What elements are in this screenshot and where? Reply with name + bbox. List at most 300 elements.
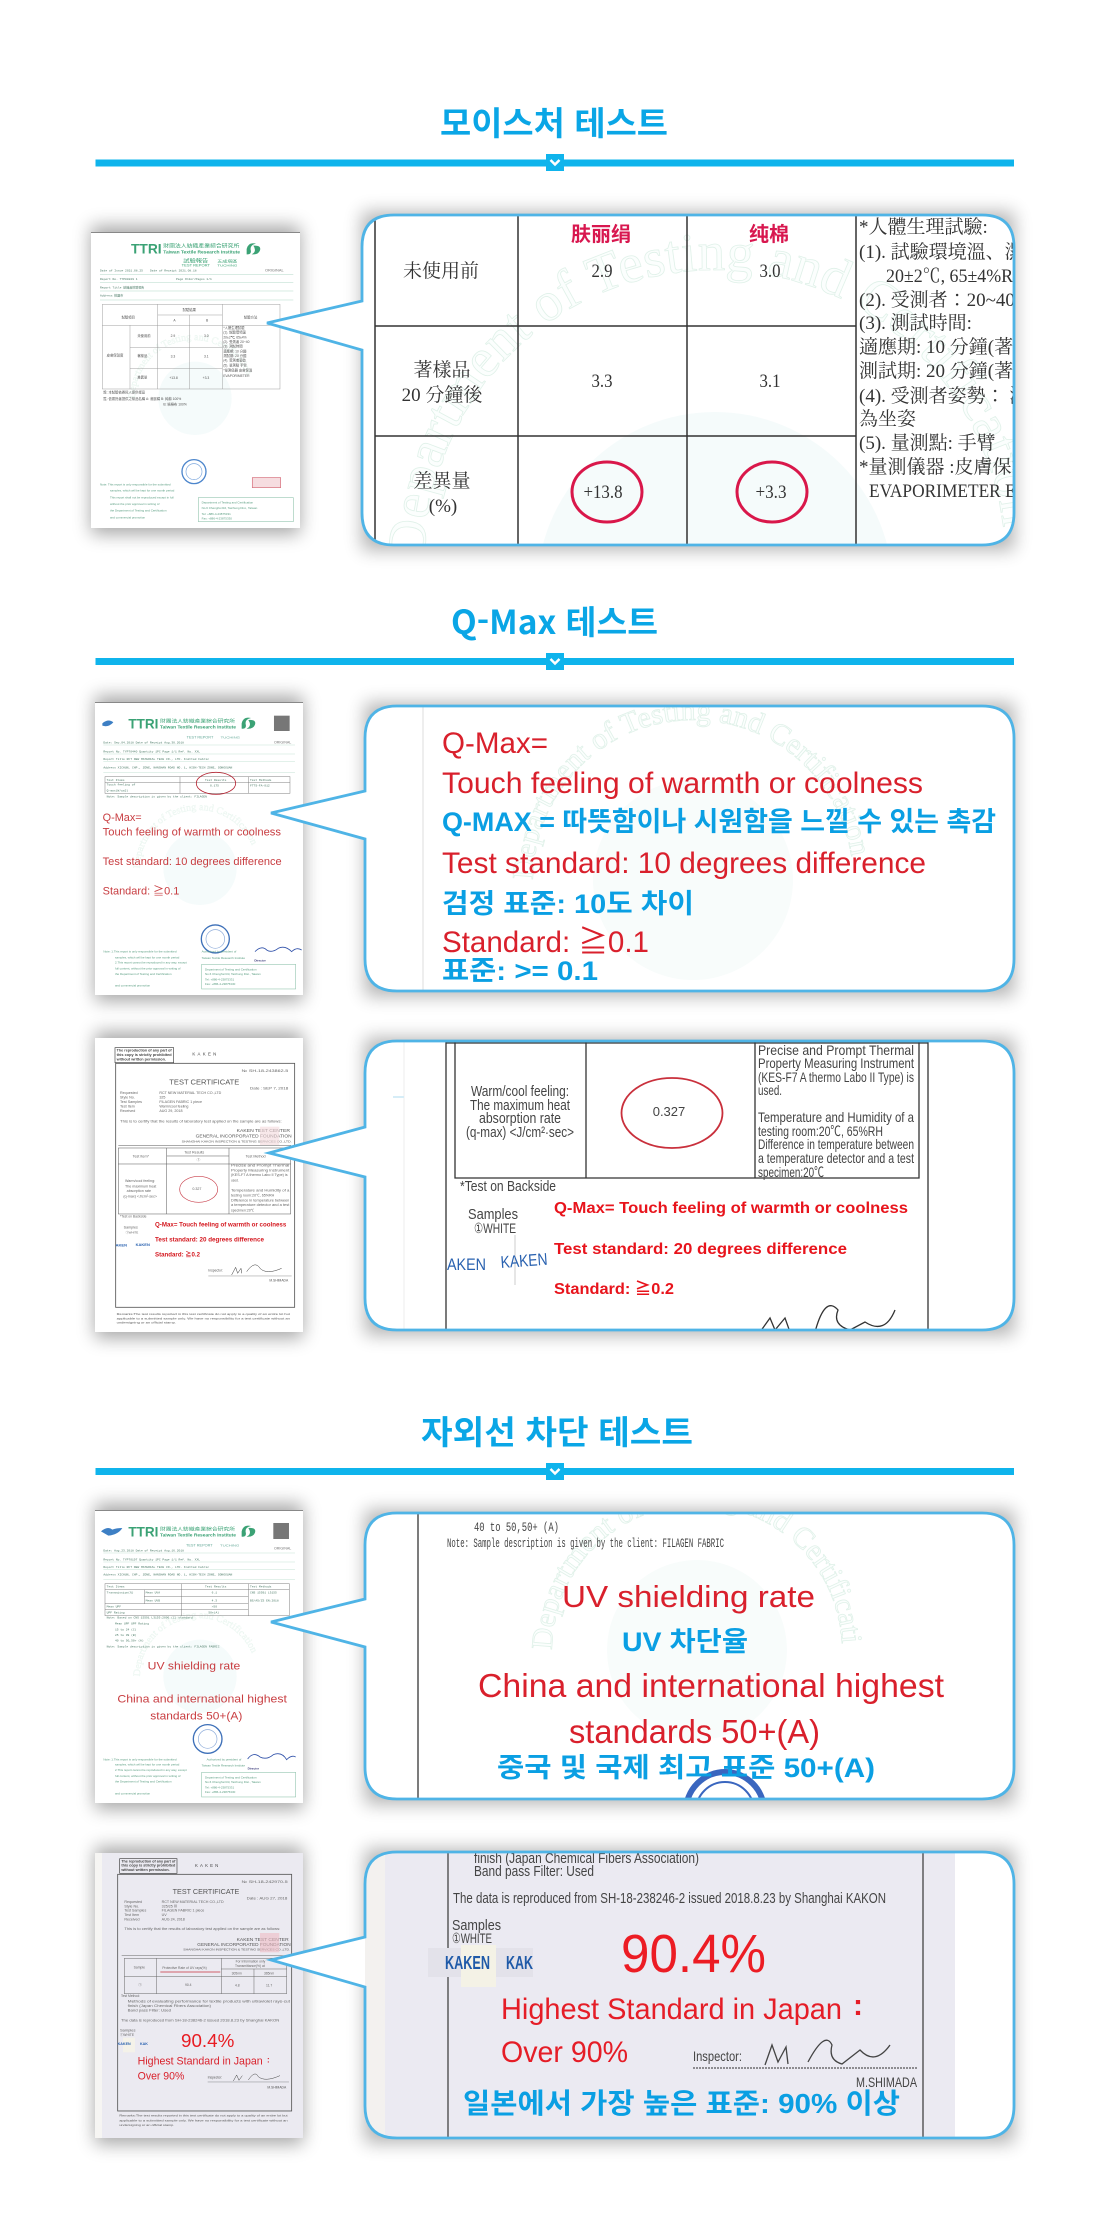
document thumbnail: TTRI moisture report: Report No. TYP00229 1 (100, 277, 138, 281)
document thumbnail: KAKEN UV certificate: TEST CERTIFICATE (173, 1887, 239, 1896)
report note lines: Note: Sample description is given by the client: FILAGEN FABRIC (447, 1536, 724, 1551)
document thumbnail: TTRI UV report: TTRI (128, 1523, 158, 1539)
English definition text: Standard: ≧0.1 (442, 926, 649, 959)
document thumbnail: TTRI moisture report: 試驗項目 (122, 314, 135, 319)
document thumbnail: TTRI moisture report: 未使用前 (137, 333, 151, 338)
document thumbnail: TTRI UV report: Test Methods (250, 1585, 272, 1589)
document thumbnail: TTRI moisture report: 20±2℃, 65±4% (223, 335, 247, 339)
test conditions notes: 測試期: 20 分鐘(著樣品) (859, 360, 1057, 382)
English standard text: : (853, 1989, 863, 2022)
scan text lines: Band pass Filter: Used (474, 1863, 594, 1880)
document thumbnail: TTRI UV report: Authorized by president of (207, 1757, 241, 1761)
document thumbnail: TTRI moisture report: B (206, 319, 209, 323)
document thumbnail: TTRI Q-Max report: Q-max(W/cm2) (107, 789, 128, 793)
table values: +13.8 (584, 482, 622, 503)
document thumbnail: TTRI Q-Max report: the Department of Testing and Certification (115, 972, 172, 976)
document thumbnail: KAKEN UV certificate: GENERAL INCORPORATED FOUNDATION (197, 1942, 291, 1947)
document thumbnail: KAKEN UV certificate: 4.8 (235, 1983, 240, 1987)
document thumbnail: TTRI Q-Max report: Authorized by president of (202, 949, 236, 953)
document thumbnail: TTRI UV report: Report Title RCT NEW MATERIAL TECH CO., LTD. Knitted Fabric (103, 1565, 209, 1569)
document thumbnail: TTRI moisture report: (4). 受測者姿勢 (223, 358, 247, 363)
document thumbnail: KAKEN Q-Max certificate: Test Item (120, 1104, 135, 1108)
fabric swatch with KAKEN print: KAKEN (500, 1250, 548, 1272)
document thumbnail: TTRI UV report: BS/AS/ZS EN:2018 (250, 1599, 279, 1603)
document thumbnail: TTRI UV report: Fax: +886-4-23875330 (205, 1790, 236, 1794)
callout: UV shielding rate (270, 1500, 1024, 1814)
document thumbnail: TTRI UV report: Mean UVA (146, 1592, 160, 1595)
test method notes: a temperature detector and a test (758, 1150, 914, 1166)
scan text lines (452, 1850, 886, 1946)
document thumbnail: TTRI Q-Max report: TTRI (128, 715, 158, 731)
document thumbnail: KAKEN Q-Max certificate: 0.327 (192, 1187, 201, 1191)
document thumbnail: TTRI moisture report: (2). 受測者 20~40 (223, 339, 250, 344)
document thumbnail: TTRI moisture report: 試驗報告 (183, 257, 208, 264)
scan text lines: finish (Japan Chemical Fibers Association) (474, 1850, 699, 1867)
document thumbnail: KAKEN UV certificate: 11.7 (266, 1983, 272, 1987)
document thumbnail: KAKEN Q-Max certificate: ①WHITE (126, 1229, 138, 1234)
red circles on difference values (572, 462, 807, 522)
document thumbnail: KAKEN UV certificate: AUG 24, 2018 (162, 1918, 185, 1922)
certificate table (446, 1041, 928, 1330)
Korean UV text: 중국 및 국제 최고 표준 50+(A) (497, 1753, 875, 1783)
callout: Q-Max definition and standard (270, 692, 1024, 1006)
warm/cool feeling label (466, 1083, 574, 1141)
samples label (468, 1208, 518, 1234)
red annotation text: Q-Max= Touch feeling of warmth or coolness (554, 1200, 908, 1217)
document thumbnail: KAKEN Q-Max certificate (95, 1032, 303, 1338)
document thumbnail: KAKEN Q-Max certificate: № SH-18-243862-5 (242, 1069, 288, 1073)
document thumbnail: KAKEN Q-Max certificate: without written permission. (116, 1057, 166, 1061)
document thumbnail: TTRI UV report: full content, without the prior approval in writing of (115, 1774, 181, 1778)
test conditions notes: *人體生理試驗: (859, 216, 988, 238)
document thumbnail: TTRI Q-Max report: Test Results (205, 778, 227, 782)
red annotation text: Standard: ≧0.2 (554, 1279, 674, 1298)
document thumbnail: TTRI moisture report: ORIGINAL (265, 269, 284, 273)
document thumbnail: KAKEN Q-Max certificate: AKEN (116, 1243, 127, 1248)
document thumbnail: TTRI moisture report: TTRI (131, 240, 162, 256)
document thumbnail: KAKEN Q-Max certificate: specimen:20℃ (231, 1209, 255, 1213)
document thumbnail: KAKEN Q-Max certificate: Property Measuring Instrument (231, 1168, 289, 1172)
document thumbnail: TTRI Q-Max report: Fax: +886-4-23875330 (205, 982, 236, 986)
test conditions notes: EVAPORIMETER EP1 (869, 481, 1034, 502)
document thumbnail: TTRI moisture report: *量測儀器 皮膚保濕 (223, 368, 253, 373)
Korean standard text: 일본에서 가장 높은 표준: 90% 이상 (463, 2088, 900, 2119)
document thumbnail: KAKEN UV certificate: Style No. (124, 1904, 139, 1908)
document thumbnail: KAKEN Q-Max certificate: KAKEN TEST CENTER (237, 1128, 290, 1133)
test conditions notes: (3). 測試時間: (859, 312, 972, 334)
result value with red circle: 0.327 (653, 1104, 685, 1119)
English UV text (478, 1579, 944, 1750)
document thumbnail: KAKEN UV certificate (95, 1847, 303, 2144)
document thumbnail: KAKEN UV certificate: KAK (140, 2042, 148, 2046)
fabric swatch with KAKEN print: KAKEN (445, 1953, 490, 1973)
document thumbnail: KAKEN Q-Max certificate: Test standard: 20 degrees difference (155, 1236, 264, 1243)
document thumbnail: KAKEN UV certificate: M.SHIMADA (267, 2085, 287, 2089)
document thumbnail: TTRI Q-Max report: Date: Sep.04.2018 Date of Receipt Aug.30.2018 (103, 740, 184, 744)
document thumbnail: TTRI moisture report: Department of Testing and Certification (202, 500, 254, 504)
document thumbnail: TTRI moisture report: No.6 Chenghsi Rd, Taichung Dist., Taiwan (202, 506, 258, 510)
document thumbnail: TTRI moisture report: Taiwan Textile Research Institute (163, 249, 240, 254)
document thumbnail: TTRI UV report: Taiwan Textile Research Institute (202, 1763, 245, 1767)
document thumbnail: KAKEN UV certificate: UV (162, 1913, 167, 1917)
document thumbnail: TTRI Q-Max report: TUCHING (221, 735, 241, 739)
document thumbnail: KAKEN UV certificate: Inspector: (208, 2076, 222, 2080)
document thumbnail: KAKEN Q-Max certificate: RCT NEW MATERIAL TECH CO.,LTD (159, 1091, 222, 1095)
document thumbnail: TTRI Q-Max report: Director (254, 959, 267, 963)
Korean definition text (442, 807, 996, 986)
document thumbnail: TTRI moisture report: B: 純棉布 100% (163, 402, 187, 407)
document thumbnail: KAKEN UV certificate: This is to certify that the results of laboratory test applied on the sample are as follows: (124, 1927, 280, 1931)
Korean definition text: 표준: >= 0.1 (442, 956, 598, 986)
document thumbnail: TTRI Q-Max report: 2.This report cannot be reproduced in any way, except (115, 961, 187, 965)
document thumbnail: TTRI UV report: 50+(A) (208, 1610, 219, 1614)
document thumbnail: KAKEN Q-Max certificate: FILAGEN FABRIC 1 piece (159, 1100, 202, 1104)
section heading: Q-Max 테스트 (96, 596, 1014, 670)
document thumbnail: KAKEN UV certificate: Samples (120, 2028, 136, 2033)
document thumbnail: TTRI UV report: Taiwan Textile Research Institute (160, 1532, 236, 1537)
document thumbnail: TTRI UV report: Department of Testing and Certification (205, 1775, 257, 1779)
document thumbnail: KAKEN Q-Max certificate: Received (120, 1109, 135, 1113)
document thumbnail: TTRI UV report: and commercial promotion (115, 1791, 151, 1795)
document thumbnail: TTRI moisture report: 3.1 (204, 355, 209, 359)
big value 90.4%: 90.4% (621, 1924, 766, 1984)
document thumbnail: TTRI UV report: Department of Testing and Certification (133, 1612, 256, 1676)
document thumbnail: TTRI UV report: UV shielding rate (148, 1661, 240, 1673)
document thumbnail: TTRI moisture report: Date of Issue 2021.08.25 (100, 269, 143, 273)
document thumbnail: TTRI Q-Max report: Test Items (107, 779, 125, 782)
document thumbnail: KAKEN UV certificate: applicable to a submitted sample only. We have no responsibility for a test certificate without an (119, 2118, 288, 2122)
table header (571, 224, 788, 244)
document thumbnail: TTRI Q-Max report: Touch feeling of (107, 783, 136, 787)
divider bar (96, 160, 1014, 166)
Korean definition text: 검정 표준: 10도 차이 (442, 889, 694, 919)
test method notes (758, 1042, 914, 1180)
document thumbnail: TTRI moisture report: Note: This report is only responsible for the submitted (100, 483, 171, 487)
document thumbnail: KAKEN UV certificate: 305nm (232, 1971, 242, 1975)
document thumbnail: TTRI Q-Max report: Touch feeling of warmth or coolness (103, 826, 281, 838)
document thumbnail: TTRI Q-Max report: No.6 Chenghsi Rd, Taichung Dist., Taiwan (205, 972, 261, 976)
test conditions notes: (1). 試驗環境溫、濕度 (859, 241, 1043, 263)
document thumbnail: TTRI UV report: Director (248, 1767, 260, 1771)
inspector signature: M.SHIMADA (856, 2074, 918, 2090)
document thumbnail: KAKEN Q-Max certificate: The reproduction of any part of (117, 1049, 173, 1053)
document thumbnail: TTRI Q-Max report: Note: 1.This report is only responsible for the submitted (103, 949, 177, 953)
document thumbnail: TTRI moisture report: (1). 試驗環境溫 (223, 330, 247, 335)
callout: UV shielding rate: Department of Testing and Certification (532, 1514, 862, 1650)
document thumbnail: TTRI UV report: TEST REPORT (186, 1543, 213, 1547)
document thumbnail: TTRI Q-Max report: TEST REPORT (187, 735, 213, 739)
document thumbnail: TTRI UV report: 6.1 (212, 1592, 217, 1595)
table values: 3.0 (760, 261, 780, 282)
document thumbnail: TTRI UV report: Mean UVB (146, 1600, 160, 1603)
document thumbnail: KAKEN Q-Max certificate: this copy is strictly prohibited (117, 1053, 172, 1057)
title: Q-Max 테스트 (451, 596, 658, 644)
document thumbnail: KAKEN Q-Max certificate: Samples (124, 1225, 138, 1229)
document thumbnail: KAKEN UV certificate: Date : AUG 27, 2018 (247, 1896, 287, 1900)
document thumbnail: TTRI Q-Max report: 財團法人紡織產業綜合研究所 (160, 717, 235, 724)
document thumbnail: KAKEN Q-Max certificate: KAKEN (136, 1242, 150, 1247)
document thumbnail: TTRI UV report: Test Results (205, 1585, 227, 1589)
document thumbnail: TTRI UV report: Test Items (107, 1586, 125, 1589)
callout: magnified KAKEN Q-Max result (269, 1038, 1014, 1335)
test method notes: (KES-F7 A thermo Labo II Type) is (758, 1069, 914, 1085)
document thumbnail: TTRI Q-Max report: Q-Max= (103, 812, 142, 824)
document thumbnail: KAKEN UV certificate: undersigning or an official stamp. (119, 2123, 175, 2127)
document thumbnail: TTRI UV report: Note: 1.This report is only responsible for the submitted (103, 1757, 177, 1761)
document thumbnail: TTRI moisture report: Page Order/Pages 1/1 (176, 277, 212, 281)
callout: magnified moisture table: Department of Testing and Certification (389, 234, 1012, 544)
document thumbnail: KAKEN Q-Max certificate: (q-max) <J/cm²·sec> (123, 1194, 157, 1198)
document thumbnail: KAKEN UV certificate: KAKEN (118, 2042, 131, 2046)
document thumbnail: TTRI moisture report: *人體生理試驗 (223, 325, 245, 330)
document thumbnail: TTRI Q-Max report: Department of Testing and Certification (205, 967, 257, 971)
document thumbnail: TTRI UV report: No.6 Chenghsi Rd, Taichung Dist., Taiwan (205, 1780, 261, 1784)
document thumbnail: KAKEN Q-Max certificate: Test Results (184, 1151, 204, 1155)
document thumbnail: KAKEN Q-Max certificate: a temperature detector and a test (231, 1203, 289, 1207)
test conditions notes: *量測儀器 :皮膚保濕 (859, 456, 1032, 478)
document thumbnail: KAKEN Q-Max certificate: absorption rate (127, 1189, 151, 1193)
document thumbnail: TTRI Q-Max report: FTTS-FA-012 (250, 784, 270, 787)
table values: +3.3 (756, 482, 786, 503)
document thumbnail: KAKEN Q-Max certificate: Date : SEP 7, 2018 (250, 1086, 288, 1090)
test conditions notes: 20±2℃, 65±4%RH (886, 266, 1026, 287)
test method notes: Precise and Prompt Thermal (758, 1042, 914, 1058)
document thumbnail: KAKEN Q-Max certificate: (KES-F7 A thermo Labo II Type) is (231, 1173, 288, 1177)
document thumbnail: TTRI Q-Max report: Test standard: 10 degrees difference (103, 856, 282, 868)
document thumbnail: TTRI UV report: UPF Rating (107, 1610, 125, 1614)
document thumbnail: KAKEN UV certificate: SHANGHAI KAKON INSPECTION & TESTING SERVICES CO.,LTD. (183, 1947, 290, 1951)
document thumbnail: TTRI moisture report: TUCHING (217, 264, 238, 268)
document thumbnail: KAKEN UV certificate: KAKEN (195, 1863, 218, 1868)
document thumbnail: KAKEN Q-Max certificate: Q-Max= Touch feeling of warmth or coolness (155, 1221, 287, 1228)
fabric swatch with KAKEN print: AKEN (447, 1255, 486, 1274)
Korean definition text: Q-MAX = 따뜻함이나 시원함을 느낄 수 있는 촉감 (442, 807, 996, 837)
document thumbnail: TTRI UV report: Transmission(%) (107, 1591, 134, 1595)
document thumbnail: KAKEN Q-Max certificate: used. (231, 1179, 239, 1183)
document thumbnail: TTRI UV report: Mean UPF (107, 1606, 121, 1609)
result value with red circle (622, 1078, 722, 1148)
icon: chevron badge (546, 653, 564, 670)
document thumbnail: TTRI moisture report: samples, which will be kept for one month period (110, 489, 175, 493)
document thumbnail: TTRI Q-Max report: Address XICHUN, CHP., ZONE, NANSHAN ROAD NO. 1, HIGH-TECH ZONE, DONGGUAN (103, 765, 232, 769)
test conditions notes: (2). 受測者：20~40 歲 (859, 289, 1039, 311)
title: 모이스처 테스트 (440, 97, 668, 145)
English definition text: Test standard: 10 degrees difference (442, 847, 926, 880)
document thumbnail: KAKEN Q-Max certificate: Warm/cool feeling: (125, 1179, 155, 1183)
document thumbnail: KAKEN UV certificate: FILAGEN FABRIC 1 piece (162, 1909, 204, 1913)
document thumbnail: KAKEN UV certificate: 365nm (264, 1971, 274, 1975)
document thumbnail: TTRI moisture report: 適應期: 10 分鐘 (223, 348, 247, 353)
document thumbnail: KAKEN UV certificate: For Information only (236, 1960, 266, 1964)
document thumbnail: TTRI moisture report (80, 214, 312, 546)
document thumbnail: TTRI Q-Max report: Note: Sample description is given by the client: FILAGEN (107, 795, 207, 799)
document thumbnail: KAKEN UV certificate: finish (Japan Chemical Fibers Association) (128, 2004, 211, 2008)
document thumbnail: TTRI moisture report: 著樣品 (137, 353, 148, 358)
document thumbnail: TTRI moisture report: (5). 量測點 手臂 (223, 362, 247, 367)
document thumbnail: KAKEN UV certificate: Received (124, 1918, 140, 1922)
table values: 2.9 (592, 261, 612, 282)
test conditions notes: (5). 量測點: 手臂 (859, 432, 996, 454)
English standard text: Highest Standard in Japan (501, 1993, 842, 2026)
document thumbnail: TTRI Q-Max report: Tel: +886-4-23875331 (205, 977, 234, 981)
document thumbnail: KAKEN Q-Max certificate: AUG 29, 2018 (159, 1109, 182, 1113)
document thumbnail: KAKEN UV certificate: Highest Standard in Japan (138, 2055, 263, 2067)
document thumbnail: TTRI moisture report: and commercial promotion (110, 515, 146, 519)
document thumbnail: KAKEN UV certificate: The data is reproduced from SH-18-238246-2 issued 2018.8.23 by Shanghai KAKON (121, 2018, 280, 2022)
document thumbnail: KAKEN Q-Max certificate: Test Samples (120, 1100, 142, 1104)
document thumbnail: TTRI moisture report: Department of Testing and Certification (128, 334, 251, 398)
document thumbnail: TTRI moisture report: A (173, 319, 176, 323)
Korean UV text: UV 차단율 (622, 1627, 748, 1657)
table row labels: (%) (429, 496, 457, 517)
blue round stamp (685, 1769, 765, 1798)
test method notes: used. (758, 1082, 782, 1098)
document thumbnail: TTRI UV report: Note: Based on CNS 15591 L3155:2006 (C) standard (107, 1616, 193, 1620)
document thumbnail: TTRI moisture report: 2.9 (171, 334, 175, 338)
document thumbnail: TTRI UV report: 財團法人紡織產業綜合研究所 (160, 1525, 235, 1532)
document thumbnail: KAKEN Q-Max certificate: GENERAL INCORPORATED FOUNDATION (196, 1133, 292, 1138)
document thumbnail: KAKEN UV certificate: ①WHITE (120, 2032, 135, 2037)
document thumbnail: KAKEN UV certificate: Test Method: (121, 1994, 140, 1998)
document thumbnail: KAKEN UV certificate: Remarks:The test results reported in this test certificate do not apply to a quality of an entire lot but (119, 2114, 288, 2118)
section heading: 자외선 차단 테스트 (96, 1406, 1014, 1480)
document thumbnail: KAKEN Q-Max certificate: TEST CERTIFICATE (169, 1078, 239, 1087)
document thumbnail: KAKEN UV certificate: Over 90% (138, 2070, 185, 2082)
document thumbnail: TTRI Q-Max report: full content, without the prior approval in writing of (115, 967, 181, 971)
document thumbnail: KAKEN UV certificate: Test Item (124, 1913, 139, 1917)
document thumbnail: TTRI moisture report: TEST REPORT (182, 264, 210, 268)
English UV text: standards 50+(A) (569, 1713, 820, 1750)
document thumbnail: TTRI UV report: Report No. TYP70197 Quantity 1PC Page 1/1 Ref. No. XXL (103, 1557, 200, 1561)
document thumbnail: TTRI moisture report: Report Title 紡織品檢驗報告 (100, 284, 144, 289)
document thumbnail: KAKEN UV certificate: this copy is strictly prohibited (121, 1864, 175, 1868)
document thumbnail: TTRI UV report: Address XICHUN, CHP., ZONE, NANSHAN ROAD NO. 1, HIGH-TECH ZONE, DONGGUAN (103, 1573, 232, 1577)
table header: 纯棉 (749, 223, 789, 246)
document thumbnail: KAKEN Q-Max certificate: Precise and Prompt Thermal (231, 1164, 290, 1168)
document thumbnail: TTRI UV report: the Department of Testing and Certification (115, 1779, 172, 1783)
document thumbnail: KAKEN Q-Max certificate: Test Method (246, 1154, 266, 1158)
document thumbnail: KAKEN Q-Max certificate: This is to certify that the results of laboratory test applied on the sample are as follows: (120, 1119, 282, 1123)
test method notes: specimen:20℃ (758, 1164, 824, 1180)
English definition text: Q-Max= (442, 727, 548, 760)
report note lines (447, 1520, 724, 1551)
document thumbnail: KAKEN UV certificate: The reproduction of any part of (121, 1859, 176, 1863)
document thumbnail: TTRI moisture report: +3.3 (203, 376, 209, 380)
English standard text: Over 90% (501, 2036, 628, 2069)
document thumbnail: TTRI Q-Max report (84, 684, 314, 1012)
document thumbnail: TTRI moisture report: This report shall not be reproduced except in full (110, 495, 174, 499)
document thumbnail: KAKEN UV certificate: Transmittance(%) at (235, 1964, 265, 1968)
document thumbnail: TTRI UV report: 25 to 39 (B) (115, 1633, 137, 1637)
document thumbnail: TTRI moisture report: 差異量 (137, 374, 148, 379)
test conditions notes: (4). 受測者姿勢： 測試 (859, 385, 1047, 407)
document thumbnail: KAKEN UV certificate: without written permission. (120, 1868, 170, 1872)
document thumbnail: TTRI UV report: China and international highest (117, 1693, 287, 1705)
warm/cool feeling label: Warm/cool feeling: (471, 1083, 569, 1100)
document thumbnail: TTRI moisture report: 註: 依委託者提供之樣品名稱 A: 膚麗絹 B: 純棉 100% (103, 396, 181, 401)
callout: Q-Max definition and standard: Department of Testing and Certification (512, 708, 865, 880)
document thumbnail: TTRI Q-Max report: Report Title RCT NEW MATERIAL TECH CO., LTD. Knitted Fabric (103, 757, 209, 761)
fabric swatch with KAKEN print (446, 1945, 533, 1987)
document thumbnail: TTRI UV report: standards 50+(A) (150, 1711, 242, 1723)
divider bar (96, 1468, 1014, 1475)
document thumbnail: TTRI moisture report: Date of Receipt 2021.08.18 (150, 269, 197, 273)
title: 자외선 차단 테스트 (421, 1406, 693, 1454)
document thumbnail: TTRI UV report: Tel: +886-4-23875331 (205, 1785, 234, 1789)
report note lines: 40 to 50,50+ (A) (474, 1520, 559, 1535)
divider bar (96, 658, 1014, 665)
document thumbnail: KAKEN Q-Max certificate: *Test on Backside (120, 1215, 147, 1219)
inspector signature: Inspector: (693, 2048, 742, 2064)
document thumbnail: KAKEN Q-Max certificate: SHANGHAI KAKON INSPECTION & TESTING SERVICES CO.,LTD. (182, 1139, 292, 1143)
table row labels: 差異量 (413, 470, 471, 492)
document thumbnail: TTRI UV report: 15 to 24 (C) (115, 1628, 137, 1632)
samples label: ①WHITE (474, 1220, 516, 1236)
document thumbnail: KAKEN UV certificate: RCT NEW MATERIAL TECH CO.,LTD (162, 1900, 224, 1904)
document thumbnail: TTRI UV report: Date: Aug.23.2018 Date of Receipt Aug.16.2018 (103, 1548, 184, 1552)
callout: Japan UV standard 90.4% (271, 1849, 1014, 2143)
English UV text: UV shielding rate (562, 1579, 815, 1614)
document thumbnail: KAKEN Q-Max certificate: Remarks:The test results reported in this test certificate do not apply to a quality of an entire lot but (117, 1312, 290, 1316)
document thumbnail: TTRI Q-Max report: Standard: ≧0.1 (103, 884, 179, 897)
test on backside note: *Test on Backside (460, 1178, 556, 1195)
Korean UV text (497, 1627, 875, 1783)
document thumbnail: KAKEN Q-Max certificate: Inspector: (208, 1269, 223, 1273)
scan text lines: Samples (452, 1917, 501, 1934)
table row labels: 著樣品 (413, 359, 471, 381)
document thumbnail: TTRI moisture report: 3.0 (204, 334, 209, 338)
scanned certificate background (365, 1852, 955, 2138)
document thumbnail: TTRI Q-Max report: Taiwan Textile Research Institute (202, 956, 245, 960)
test conditions notes: 為坐姿 (859, 408, 916, 430)
document thumbnail: KAKEN Q-Max certificate: Style No. (120, 1096, 135, 1100)
table row labels: 未使用前 (403, 260, 479, 282)
document thumbnail: TTRI moisture report: Address 桃園市 (100, 293, 123, 298)
document thumbnail: KAKEN Q-Max certificate: Temperature and Humidity of a (231, 1189, 290, 1193)
document thumbnail: TTRI Q-Max report: and commercial promotion (115, 983, 151, 987)
table values: 3.1 (760, 371, 780, 392)
samples label: Samples (468, 1206, 518, 1223)
document thumbnail: KAKEN UV certificate: Band pass Filter: Used (128, 2008, 171, 2012)
document thumbnail: TTRI UV report (84, 1492, 314, 1820)
icon: chevron badge (546, 1463, 564, 1480)
test method notes: Temperature and Humidity of a (758, 1109, 914, 1125)
signature (760, 1306, 895, 1332)
document thumbnail: KAKEN Q-Max certificate: Test Item* (133, 1154, 149, 1158)
document thumbnail: KAKEN UV certificate: : (267, 2055, 270, 2064)
document thumbnail: TTRI moisture report: (3). 測試時間 (223, 344, 243, 349)
document thumbnail: TTRI moisture report: 財團法人紡織產業綜合研究所 (163, 243, 239, 250)
table row labels: 20 分鐘後 (402, 384, 483, 406)
infographic page (80, 107, 1024, 2156)
document thumbnail: TTRI UV report: TUCHING (220, 1543, 240, 1547)
document thumbnail: KAKEN Q-Max certificate: testing room:20℃, 65%RH (231, 1194, 275, 1198)
scan text lines: ①WHITE (452, 1930, 492, 1946)
document thumbnail: TTRI UV report: 40 to 50,50+ (A) (115, 1639, 144, 1643)
warm/cool feeling label: absorption rate (479, 1110, 561, 1127)
document thumbnail: TTRI Q-Max report: Department of Testing and Certification (133, 804, 256, 868)
document thumbnail: TTRI UV report: Note: Sample description is given by the client: FILAGEN FABRIC (107, 1644, 220, 1648)
table values (584, 261, 786, 503)
warm/cool feeling label: (q-max) <J/cm²·sec> (466, 1124, 574, 1141)
warm/cool feeling label: The maximum heat (470, 1097, 571, 1114)
English UV text: China and international highest (478, 1667, 944, 1704)
section heading: 모이스처 테스트 (96, 97, 1014, 171)
fabric swatch with KAKEN print: KAK (506, 1953, 533, 1973)
table values: 3.3 (592, 371, 612, 392)
document thumbnail: KAKEN Q-Max certificate: Requested (120, 1091, 138, 1095)
test method notes: Property Measuring Instrument (758, 1055, 914, 1071)
